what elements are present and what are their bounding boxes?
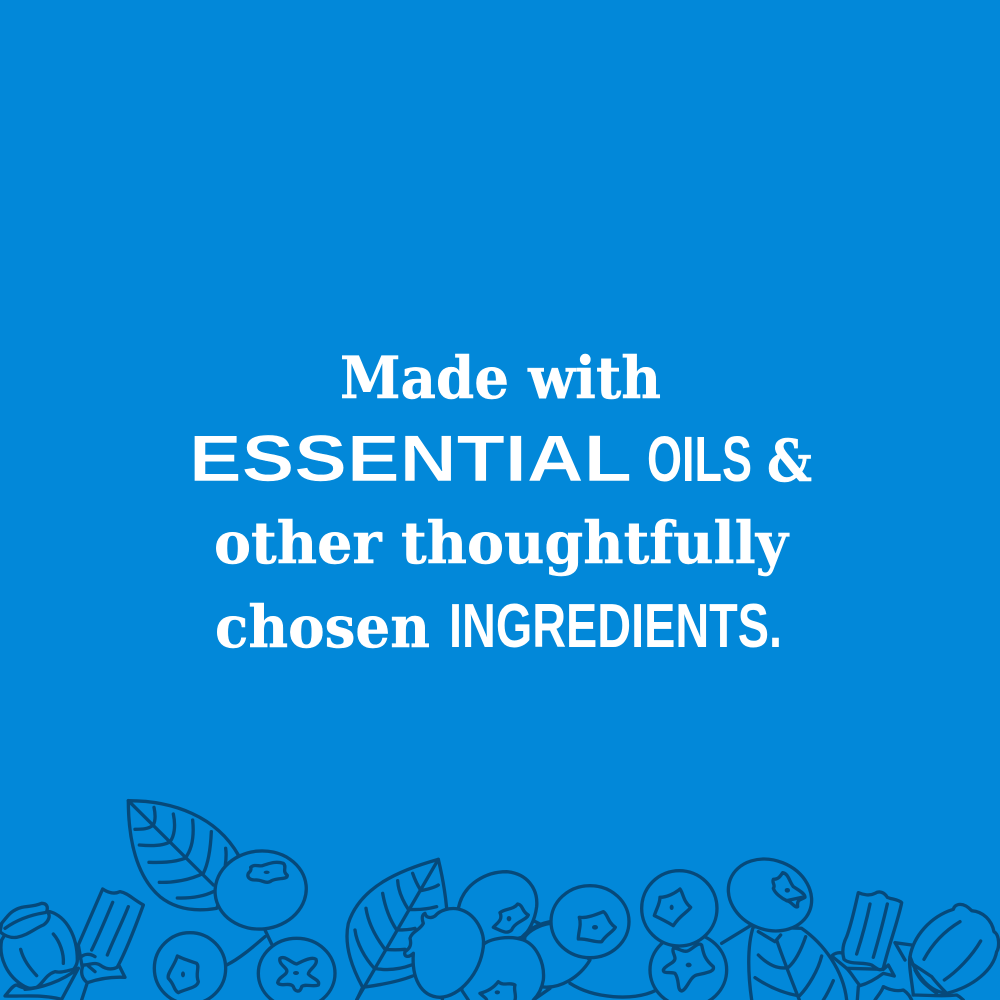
headline text: & <box>767 427 812 495</box>
icon: blueberry top <box>211 846 310 934</box>
icon: star blueberry <box>650 933 727 1000</box>
icon: blueberry centre front <box>405 909 484 997</box>
icon: leaf centre <box>347 859 447 1000</box>
icon: back berry behind centre right <box>520 923 590 1000</box>
icon: blueberry lower left <box>154 933 226 1000</box>
icon: hazelnut left <box>0 903 125 1000</box>
headline text: other thoughtfully <box>214 509 790 577</box>
icon: blueberry lower middle <box>258 938 335 1000</box>
icon: leaf top left <box>128 801 238 910</box>
headline text: Made with <box>340 344 661 412</box>
icon: cinnamon stick right with wrapper <box>832 892 912 1000</box>
illustration: left group <box>0 801 590 1000</box>
icon: curved stem <box>570 983 657 997</box>
headline text: INGREDIENTS. <box>449 592 782 661</box>
icon: blueberry tilted <box>717 847 823 943</box>
headline text: ESSENTIAL <box>189 421 632 495</box>
icon: leaf right <box>749 927 847 1000</box>
headline text <box>189 344 812 661</box>
icon: cinnamon stick left <box>78 889 143 973</box>
icon: blueberry behind centre <box>458 872 550 950</box>
icon: blueberry bottom centre <box>462 938 544 1000</box>
icon: hazelnut right <box>895 904 999 1000</box>
illustration: right group <box>551 847 999 1000</box>
headline text: OILS <box>647 423 752 495</box>
icon: blueberry upper right <box>642 871 717 946</box>
icon: stem right <box>722 926 750 943</box>
icon: blueberry centre right <box>551 886 629 958</box>
headline text: chosen <box>215 593 430 661</box>
icon: stems between berries <box>227 930 272 965</box>
botanical line illustration border <box>0 801 999 1000</box>
